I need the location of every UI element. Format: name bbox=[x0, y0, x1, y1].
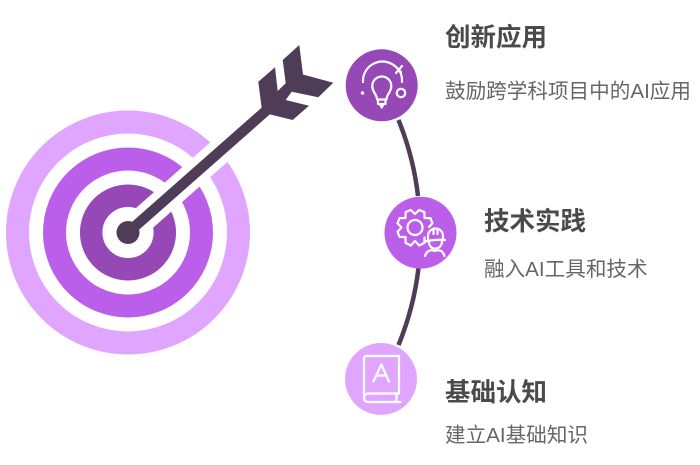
arrow fletching bbox=[258, 45, 333, 120]
heading: practice: 技术实践 bbox=[484, 208, 586, 236]
target with arrow bbox=[18, 45, 333, 343]
text: innovation description: 鼓励跨学科项目中的AI应用 bbox=[445, 80, 691, 103]
target middle ring bbox=[54, 159, 202, 306]
icon: light bulb bbox=[346, 49, 418, 121]
target outer ring bbox=[18, 122, 238, 343]
icon: book bbox=[345, 343, 417, 415]
icon: gear and worker bbox=[384, 197, 456, 269]
heading: innovation: 创新应用 bbox=[445, 23, 547, 52]
heading: basics: 基础认知 bbox=[445, 379, 547, 407]
target hub bbox=[116, 221, 140, 244]
arrow shaft bbox=[128, 109, 268, 232]
arrow gap bbox=[128, 114, 262, 232]
connecting arc bbox=[398, 120, 418, 345]
text: basics description: 建立AI基础知识 bbox=[445, 424, 588, 447]
text: practice description: 融入AI工具和技术 bbox=[484, 258, 648, 281]
target inner ring bbox=[91, 196, 165, 269]
